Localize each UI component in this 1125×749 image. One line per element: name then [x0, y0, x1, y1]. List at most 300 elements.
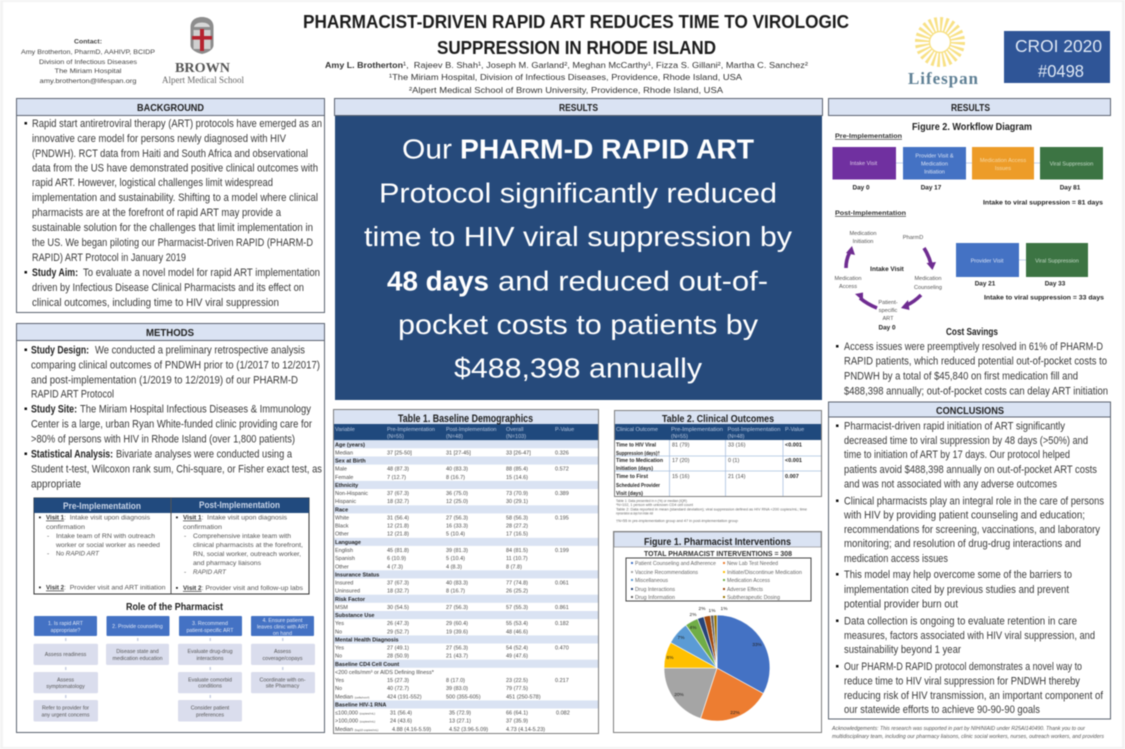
table 1: baseline demographics: 5 (10.4): [446, 556, 465, 562]
panel: results headline: [334, 98, 822, 400]
workflow: post-implementation cycle: Day 0: [878, 324, 896, 332]
table 2: clinical outcomes: Clinical Outcome: [616, 427, 658, 433]
table 2: clinical outcomes: Pre-Implementation: [671, 427, 723, 433]
workflow: post-implementation cycle: Provider Visit: [971, 258, 1004, 264]
panel: background: Rapid start antiretroviral therapy (ART) protocols have emerged as an: [32, 118, 322, 130]
table footnotes: [616, 499, 807, 523]
table 1: baseline demographics: 28 (27.2): [506, 524, 528, 530]
flow: role of the pharmacist boxes: preferences: [196, 712, 224, 718]
table 1: baseline demographics: Yes: [335, 646, 344, 652]
table 1: baseline demographics: 4.73 (4.14-5.23): [506, 727, 545, 733]
table 1: baseline demographics: 27 (56.3): [446, 646, 468, 652]
table 2: clinical outcomes: Time to First: [616, 474, 648, 480]
table footnotes: †N=55 in pre-implementation group and 47 in post-implementation group: [616, 519, 738, 523]
table 1: baseline demographics: Variable: [335, 427, 355, 433]
icon: Brown Alpert Medical School logo: Alpert Medical School: [162, 75, 244, 86]
table 2: clinical outcomes: Post-Implementation: [728, 427, 780, 433]
table 1: baseline demographics: 28 (50.9): [387, 654, 409, 660]
flow: role of the pharmacist boxes: any urgent concerns: [42, 712, 90, 718]
workflow: pre-implementation: Medication: [921, 162, 948, 168]
table 2: clinical outcomes: 33 (16): [728, 442, 746, 448]
table 2: clinical outcomes: 81 (79): [672, 442, 690, 448]
pie chart: 22%: [730, 710, 741, 716]
table 1: baseline demographics: 0.199: [555, 548, 569, 554]
table 2: clinical outcomes: Time to Medication: [616, 458, 664, 464]
table footnotes: Table 1: Data presented in n (%) or median (IQR): [616, 499, 687, 503]
badge: CROI 2020 #0498: [1004, 31, 1110, 83]
table 1: baseline demographics: 11 (10.7): [506, 556, 528, 562]
chart legend: Drug Interactions: [635, 587, 675, 593]
table 1: baseline demographics: 29 (52.7): [387, 629, 409, 635]
table 1: baseline demographics: >100,000 (copies/mL): [335, 719, 375, 725]
panel: conclusions: reduce time to HIV viral suppression for PNDWH thereby: [844, 676, 1081, 688]
panel: methods: Study Site:: [31, 404, 77, 416]
panel: conclusions: time to initiation of ART by 17 days. Our protocol helped: [844, 449, 1070, 461]
table 1: baseline demographics: 19 (39.6): [446, 629, 468, 635]
panel: results workflow: RESULTS: [951, 103, 990, 114]
table 1: baseline demographics: 12 (25.0): [446, 499, 468, 505]
workflow: post-implementation cycle: Medication: [914, 276, 942, 282]
panel: background: Study Aim:: [32, 267, 78, 279]
table: pre vs post implementation: Pre-Implementation: [63, 501, 141, 512]
flow: role of the pharmacist boxes: Disease state and: [116, 649, 159, 655]
table 1: baseline demographics: 73 (70.9): [506, 491, 528, 497]
workflow: post-implementation cycle: Access: [839, 284, 857, 290]
table 1: baseline demographics: 37 (35.9): [506, 719, 528, 725]
flow: role of the pharmacist boxes: appropriate?: [51, 628, 80, 634]
panel: methods: METHODS: [146, 328, 194, 339]
panel: conclusions: medication access issues: [844, 553, 949, 565]
panel: results headline: Protocol significantly reduced: [379, 177, 777, 208]
pie chart: 33%: [752, 642, 763, 648]
workflow: pre-implementation: Medication Access: [980, 158, 1026, 164]
table 1: baseline demographics: 31 (56.4): [387, 516, 409, 522]
table 1: baseline demographics: 37 (67.3): [387, 491, 409, 497]
flow: role of the pharmacist boxes: Refer to provider for: [42, 706, 89, 712]
flow: role of the pharmacist boxes: Evaluate drug-drug: [187, 649, 233, 655]
panel: conclusions: implementation cited by previous studies and prevent: [844, 584, 1069, 596]
authors and affiliations: [325, 60, 808, 95]
workflow: pre-implementation: Pre-Implementation: [835, 133, 902, 140]
table 1: baseline demographics: 37 (67.3): [387, 580, 409, 586]
authors and affiliations: Amy L. Brotherton: [325, 60, 403, 70]
table 1: baseline demographics: 12 (21.8): [387, 524, 409, 530]
panel: background: pharmacists are at the forefront of rapid ART may provide a: [32, 207, 281, 219]
panel: conclusions: Our PHARM-D RAPID protocol demonstrates a novel way to: [844, 661, 1082, 673]
panel: background: clinical outcomes, including time to HIV viral suppression: [32, 297, 279, 309]
table 1: baseline demographics: Uninsured: [335, 589, 360, 595]
table: pre vs post implementation: Visit 2: [46, 584, 64, 592]
flow: role of the pharmacist boxes: Assess: [57, 678, 74, 684]
table: pre vs post implementation: Visit 1: [46, 514, 64, 522]
table 1: baseline demographics: 8 (7.8): [506, 564, 522, 570]
workflow: post-implementation cycle: Viral Suppression: [1035, 258, 1079, 264]
table footnotes: *N=102, 1 person with unknown CD4 cell count: [616, 503, 693, 507]
chart legend: Medication Access: [727, 578, 770, 584]
panel: methods: >80% of persons with HIV in Rhode Island (over 1,800 patients): [31, 434, 295, 446]
panel: background: BACKGROUND: [137, 103, 204, 114]
panel: background: (PNDWH). RCT data from Haiti and South Africa and observational: [32, 148, 308, 160]
workflow: pre-implementation: Provider Visit &: [915, 154, 954, 160]
table 1: baseline demographics: 26 (47.3): [387, 621, 409, 627]
table 1: baseline demographics: P-Value: [555, 427, 574, 433]
workflow: post-implementation cycle: ART: [882, 316, 894, 322]
panel: results headline: PHARM-D RAPID ART: [460, 133, 754, 164]
workflow: post-implementation cycle: PharmD: [903, 235, 923, 241]
table 1: baseline demographics: 31 [27-45]: [446, 450, 471, 456]
table 1: baseline demographics: 36 (75.0): [446, 491, 468, 497]
panel: background: sustainable solution for the challenges that limit implementation in: [32, 222, 313, 234]
table 2: clinical outcomes: Table 2. Clinical Outcomes: [662, 413, 774, 425]
panel: conclusions: This model may help overcome some of the barriers to: [844, 569, 1072, 581]
table 1: baseline demographics: 29 (60.4): [446, 621, 468, 627]
table 1: baseline demographics: Median: [335, 450, 353, 456]
chart legend: Adverse Effects: [727, 587, 763, 593]
icon: Brown Alpert Medical School logo: [162, 17, 244, 86]
table 1: baseline demographics: 0.389: [555, 491, 569, 497]
table 1: baseline demographics: 4.52 (3.96-5.09): [449, 727, 488, 733]
table 1: baseline demographics: 48 (46.6): [506, 629, 528, 635]
panel: methods: We conducted a preliminary retrospective analysis: [95, 344, 306, 356]
pie chart: 7%: [678, 635, 685, 641]
panel: background: innovative care model for persons newly diagnosed with HIV: [32, 133, 287, 145]
table 1: baseline demographics: 77 (74.8): [506, 580, 528, 586]
table 1: baseline demographics: Insured: [335, 580, 353, 586]
table: pre vs post implementation: Intake team of RN with outreach: [56, 533, 155, 540]
table 1: baseline demographics: No: [335, 654, 342, 660]
panel: conclusions: sustainability beyond 1 year: [844, 644, 961, 656]
table 2: clinical outcomes: <0.001: [785, 442, 802, 448]
table 1: baseline demographics: Substance Use: [335, 613, 374, 619]
table 1: baseline demographics: 30 (54.5): [387, 605, 409, 611]
table 1: baseline demographics: Pre-Implementation: [387, 427, 435, 433]
table 1: baseline demographics: Non-Hispanic: [335, 491, 368, 497]
flow: role of the pharmacist boxes: Assess readiness: [45, 652, 87, 658]
table 1: baseline demographics: 58 (56.3): [506, 516, 528, 522]
table 1: baseline demographics: Baseline CD4 Cell Count: [335, 662, 399, 668]
table 1: baseline demographics: 5 (10.4): [446, 532, 465, 538]
chart legend: Miscellaneous: [635, 578, 668, 584]
table: pre vs post implementation: confirmation: [46, 524, 85, 531]
flow: role of the pharmacist boxes: medication education: [112, 656, 163, 662]
panel: conclusions: our statewide efforts to achieve 90-90-90 goals: [844, 704, 1041, 716]
panel: methods: Center is a large, urban Ryan White-funded clinic providing care for: [31, 418, 312, 430]
table 1: baseline demographics: 451 (250-578): [506, 694, 541, 700]
table 1: baseline demographics: 8 (17.0): [446, 678, 465, 684]
flow: role of the pharmacist boxes: on hand: [273, 631, 292, 637]
table 1: baseline demographics: 39 (81.3): [446, 548, 468, 554]
table 1: baseline demographics: 8 (16.7): [446, 475, 465, 481]
flow: role of the pharmacist boxes: symptomatology: [46, 684, 85, 690]
table 2: clinical outcomes: <0.001: [785, 458, 802, 464]
table: pre vs post implementation: [34, 498, 309, 594]
flow: role of the pharmacist boxes: 1. Is rapid ART: [48, 621, 84, 627]
table 1: baseline demographics: 18 (32.7): [387, 499, 409, 505]
table 1: baseline demographics: 23 (22.5): [506, 678, 528, 684]
table: pre vs post implementation: clinical pharmacists at the forefront,: [193, 542, 303, 549]
table 1: baseline demographics: 0.061: [555, 580, 569, 586]
table 2: clinical outcomes: P-Value: [785, 427, 804, 433]
title: SUPPRESSION IN RHODE ISLAND: [437, 38, 716, 58]
icon: Lifespan logo: [908, 24, 979, 88]
panel: methods: The Miriam Hospital Infectious Diseases & Immunology: [80, 404, 312, 416]
panel: background: [16, 98, 324, 312]
table 1: baseline demographics: 24 (43.6): [390, 719, 412, 725]
cost savings: Cost Savings: [946, 326, 998, 338]
table 1: baseline demographics: 15 (14.6): [506, 475, 528, 481]
table 1: baseline demographics: Age (years): [335, 442, 365, 448]
table 1: baseline demographics: Language: [335, 540, 361, 546]
cost savings: PNDWH by a total of $45,840 on first medication fill and: [844, 370, 1078, 382]
panel: conclusions: Pharmacist-driven rapid initiation of ART significantly: [844, 420, 1066, 432]
table 1: baseline demographics: 40 (72.7): [387, 686, 409, 692]
pie chart: 1%: [709, 608, 716, 614]
table 1: baseline demographics: 45 (81.8): [387, 548, 409, 554]
table 2: clinical outcomes: 15 (16): [672, 474, 690, 480]
panel: results headline: RESULTS: [559, 103, 598, 114]
table 1: baseline demographics: 40 (83.3): [446, 580, 468, 586]
table 1: baseline demographics: 84 (81.5): [506, 548, 528, 554]
chart legend: Drug Information: [635, 595, 675, 601]
workflow: post-implementation cycle: Initiation: [853, 239, 873, 245]
panel: methods: and post-implementation (1/2019 to 12/2019) of our PHARM-D: [31, 374, 298, 386]
table 1: baseline demographics: 27 (56.3): [446, 516, 468, 522]
flow: role of the pharmacist boxes: site Pharmacy: [266, 684, 300, 690]
pie chart: 4%: [690, 625, 697, 631]
table 2: clinical outcomes: 0.007: [785, 474, 799, 480]
panel: results headline: $488,398 annually: [454, 353, 702, 384]
table: pre vs post implementation: : Intake visit upon diagnosis: [202, 514, 288, 522]
flow: role of the pharmacist boxes: leaves clinic with ART: [257, 624, 309, 630]
table 1: baseline demographics: Baseline HIV-1 RNA: [335, 702, 386, 708]
flow: role of the pharmacist boxes: Assess: [274, 649, 291, 655]
table 1: baseline demographics: No: [335, 686, 342, 692]
flow: role of the pharmacist boxes: Consider patient: [191, 706, 230, 712]
table 1: baseline demographics: (N=48): [446, 434, 463, 440]
table 1: baseline demographics: Table 1. Baseline Demographics: [398, 413, 533, 425]
table 1: baseline demographics: 57 (55.3): [506, 605, 528, 611]
panel: results headline: and reduced out-of-: [498, 265, 768, 296]
table 1: baseline demographics: White: [335, 516, 349, 522]
table 1: baseline demographics: 18 (32.7): [387, 589, 409, 595]
table 1: baseline demographics: 21 (43.7): [446, 654, 468, 660]
table 1: baseline demographics: Black: [335, 524, 349, 530]
contact block: Division of Infectious Diseases: [39, 59, 138, 66]
table 1: baseline demographics: Post-Implementation: [446, 427, 496, 433]
table 1: baseline demographics: Yes: [335, 621, 344, 627]
badge: CROI 2020 #0498: #0498: [1038, 61, 1084, 81]
workflow: post-implementation cycle: [834, 210, 1104, 332]
workflow: pre-implementation: Viral Suppression: [1050, 162, 1093, 168]
table 1: baseline demographics: 33 [26-47]: [506, 450, 531, 456]
panel: methods: RAPID ART Protocol: [31, 388, 114, 400]
workflow: pre-implementation: Day 81: [1060, 184, 1081, 192]
table 1: baseline demographics: Sex at Birth: [335, 459, 366, 465]
workflow: pre-implementation: Intake Visit: [850, 161, 878, 167]
table: pre vs post implementation: -: [184, 569, 186, 576]
table: pre vs post implementation: -: [47, 550, 49, 558]
workflow: post-implementation cycle: Post-Implementation: [835, 210, 906, 217]
workflow: pre-implementation: Day 17: [921, 184, 942, 192]
figure 1: pharmacist interventions: Figure 1. Pharmacist Interventions: [644, 536, 791, 548]
pie chart: 1%: [721, 606, 728, 612]
table 1: baseline demographics: <200 cells/mm³ or AIDS Defining Illness*: [335, 670, 435, 676]
table 2: clinical outcomes: (N=48): [728, 434, 745, 440]
pie chart: [664, 606, 770, 721]
chart legend: Vaccine Recommendations: [635, 570, 698, 576]
panel: background: driven by Infectious Disease Clinical Pharmacists and its effect on: [32, 282, 304, 294]
table 1: baseline demographics: 37 [25-50]: [387, 450, 412, 456]
table 1: baseline demographics: 35 (72.9): [449, 711, 471, 717]
panel: methods: comparing clinical outcomes of PNDWH prior to (1/2017 to 12/2017): [31, 360, 320, 372]
table 1: baseline demographics: Insurance Status: [335, 572, 379, 578]
panel: conclusions: with HIV by providing patient counseling and education;: [843, 510, 1085, 522]
table 1: baseline demographics: 31 (56.4): [390, 711, 412, 717]
panel: results headline: 48 days: [387, 265, 489, 296]
acknowledgements: [831, 726, 1105, 740]
title: PHARMACIST-DRIVEN RAPID ART REDUCES TIME TO VIROLOGIC: [303, 12, 849, 32]
table 1: baseline demographics: Other: [335, 532, 349, 538]
table 1: baseline demographics: 500 (355-605): [446, 694, 481, 700]
panel: results headline: pocket costs to patients by: [398, 309, 758, 340]
table: pre vs post implementation: : Intake visit upon diagnosis: [64, 514, 151, 522]
contact block: amy.brotherton@lifespan.org: [40, 78, 137, 85]
panel: conclusions: and was not associated with any adverse outcomes: [844, 478, 1058, 490]
table 1: baseline demographics: 0.470: [555, 646, 569, 652]
icon: Lifespan logo: Lifespan: [908, 69, 979, 88]
panel: methods: Statistical Analysis:: [31, 448, 113, 460]
table 1: baseline demographics: Race: [335, 507, 348, 513]
flow: role of the pharmacist boxes: Coordinate with on-: [260, 678, 306, 684]
table 1: baseline demographics: (N=55): [387, 434, 404, 440]
table 1: baseline demographics: Mental Health Diagnosis: [335, 637, 399, 643]
authors and affiliations: ²Alpert Medical School of Brown University, Providence, Rhode Island, USA: [409, 85, 723, 95]
pie chart: 8%: [667, 655, 674, 661]
workflow: post-implementation cycle: Medication: [834, 276, 862, 282]
table 1: baseline demographics: 39 (83.0): [446, 686, 468, 692]
table 1: baseline demographics: Male: [335, 467, 347, 473]
panel: methods: [16, 324, 324, 732]
table 2: clinical outcomes: Initiation (days): [616, 466, 653, 472]
workflow: pre-implementation: Issues: [995, 166, 1011, 172]
table 1: baseline demographics: 40 (83.3): [446, 467, 468, 473]
table 1: baseline demographics: 0.217: [555, 678, 569, 684]
table 1: baseline demographics: 424 (191-552): [387, 694, 422, 700]
table 2: clinical outcomes: Suppression (days)†: [616, 451, 660, 457]
table 1: baseline demographics: Risk Factor: [335, 597, 366, 603]
table 1: baseline demographics: 6 (10.9): [387, 556, 406, 562]
table: pre vs post implementation: confirmation: [183, 524, 222, 531]
table: pre vs post implementation: RAPID ART: [193, 569, 227, 576]
panel: methods: Student t-test, Wilcoxon rank sum, Chi-square, or Fisher exact test, as: [31, 464, 323, 476]
chart legend: [626, 558, 811, 601]
authors and affiliations: ¹, Rajeev B. Shah¹, Joseph M. Garland², Meghan McCarthy¹, Fizza S. Gillani², Martha C. Sanchez²: [403, 60, 808, 70]
table 1: baseline demographics: 7 (12.7): [387, 475, 406, 481]
table 1: baseline demographics: 4 (8.3): [446, 564, 462, 570]
table 1: baseline demographics: 54 (52.4): [506, 646, 528, 652]
table 1: baseline demographics: 27 (49.1): [387, 646, 409, 652]
panel: conclusions: [828, 402, 1110, 719]
table 2: clinical outcomes: (N=55): [671, 434, 688, 440]
panel: background: the US. We began piloting our Pharmacist-Driven RAPID (PHARM-D: [32, 237, 313, 249]
acknowledgements: multidisciplinary team, including our pharmacy liaisons, clinic social workers, nurses, outreach workers, and providers: [832, 734, 1105, 740]
flow: role of the pharmacist boxes: interactions: [196, 656, 224, 662]
table 1: baseline demographics: 48 (87.3): [387, 467, 409, 473]
chart legend: Initiate/Discontinue Medication: [727, 570, 802, 576]
table: pre vs post implementation: -: [184, 533, 186, 540]
figure 1: pharmacist interventions: [614, 532, 822, 732]
table: pre vs post implementation: RN, social worker, outreach worker,: [193, 551, 301, 558]
workflow: post-implementation cycle: Medication: [849, 231, 877, 237]
workflow: pre-implementation: Initiation: [924, 170, 945, 176]
table 1: baseline demographics: 0.326: [555, 450, 569, 456]
panel: conclusions: CONCLUSIONS: [936, 406, 1004, 417]
table 2: clinical outcomes: 21 (14): [728, 474, 746, 480]
table 1: baseline demographics: (N=103): [506, 434, 526, 440]
table 1: baseline demographics: 4.88 (4.16-5.59): [392, 727, 431, 733]
table 1: baseline demographics: Median (log10 copies/mL): [335, 727, 378, 733]
table 1: baseline demographics: Spanish: [335, 556, 355, 562]
table: pre vs post implementation: worker or social worker as needed: [55, 542, 160, 549]
table: pre vs post implementation: : Provider visit and follow-up labs: [202, 585, 304, 592]
workflow: pre-implementation: Day 0: [852, 184, 870, 192]
figure 1: pharmacist interventions: TOTAL PHARMACIST INTERVENTIONS = 308: [644, 549, 792, 558]
table 1: baseline demographics: 15 (27.3): [387, 678, 409, 684]
table: pre vs post implementation: Visit 2: [183, 585, 202, 592]
workflow: post-implementation cycle: Counseling: [914, 285, 942, 291]
table 1: baseline demographics: 0.861: [555, 605, 569, 611]
heading: figure 2: Figure 2. Workflow Diagram: [912, 121, 1032, 133]
chart legend: New Lab Test Needed: [727, 561, 778, 567]
table 1: baseline demographics: 79 (77.5): [506, 686, 528, 692]
panel: background: rapid ART. However, logistical challenges limit widespread: [32, 177, 273, 189]
panel: background: RAPID) ART Protocol in January 2019: [32, 252, 186, 264]
table 1: baseline demographics: 66 (64.1): [506, 711, 528, 717]
workflow: pre-implementation: [832, 133, 1103, 206]
table 1: baseline demographics: 49 (47.6): [506, 654, 528, 660]
panel: methods: Study Design:: [31, 344, 89, 356]
table 1: baseline demographics: 30 (29.1): [506, 499, 528, 505]
table 2: clinical outcomes: Visit (days): [616, 491, 643, 497]
icon: Brown Alpert Medical School logo: BROWN: [175, 61, 230, 76]
table: pre vs post implementation: and pharmacy liaisons: [193, 560, 262, 567]
panel: methods: Bivariate analyses were conducted using a: [116, 448, 292, 460]
flow: role of the pharmacist boxes: conditions: [198, 684, 222, 690]
table 1: baseline demographics: 12 (21.8): [387, 532, 409, 538]
table 1: baseline demographics: [334, 410, 598, 734]
contact block: Amy Brotherton, PharmD, AAHIVP, BCIDP: [21, 49, 156, 56]
flow: role of the pharmacist boxes: 3. Recommend: [192, 621, 228, 627]
panel: conclusions: Data collection is ongoing to evaluate retention in care: [844, 616, 1077, 628]
table 2: clinical outcomes: 0 (1): [728, 458, 739, 464]
panel: background: implementation and sustainability. Shifting to a model where clinical: [32, 192, 318, 204]
table 1: baseline demographics: Female: [335, 475, 353, 481]
table 1: baseline demographics: ≤100,000 (copies/mL): [335, 711, 375, 717]
flow: role of the pharmacist boxes: [34, 616, 315, 722]
table: pre vs post implementation: Post-Implementation: [199, 500, 280, 511]
heading: role of the pharmacist: Role of the Pharmacist: [126, 601, 223, 613]
workflow: post-implementation cycle: Intake to viral suppression = 33 days: [984, 294, 1104, 302]
panel: background: data from the US have demonstrated positive clinical outcomes with: [32, 162, 318, 174]
table 2: clinical outcomes: Scheduled Provider: [616, 483, 661, 489]
table: pre vs post implementation: Visit 1: [183, 514, 202, 522]
flow: role of the pharmacist boxes: patient-specific ART: [186, 628, 234, 634]
table 1: baseline demographics: Overall: [506, 427, 523, 433]
panel: conclusions: potential provider burn out: [844, 598, 958, 610]
acknowledgements: Acknowledgements: This research was supported in part by NIH/NIAID under R25AI140490. Thank you to our: [831, 726, 1085, 732]
table 1: baseline demographics: Hispanic: [335, 499, 356, 505]
contact block: Contact:: [74, 38, 102, 46]
